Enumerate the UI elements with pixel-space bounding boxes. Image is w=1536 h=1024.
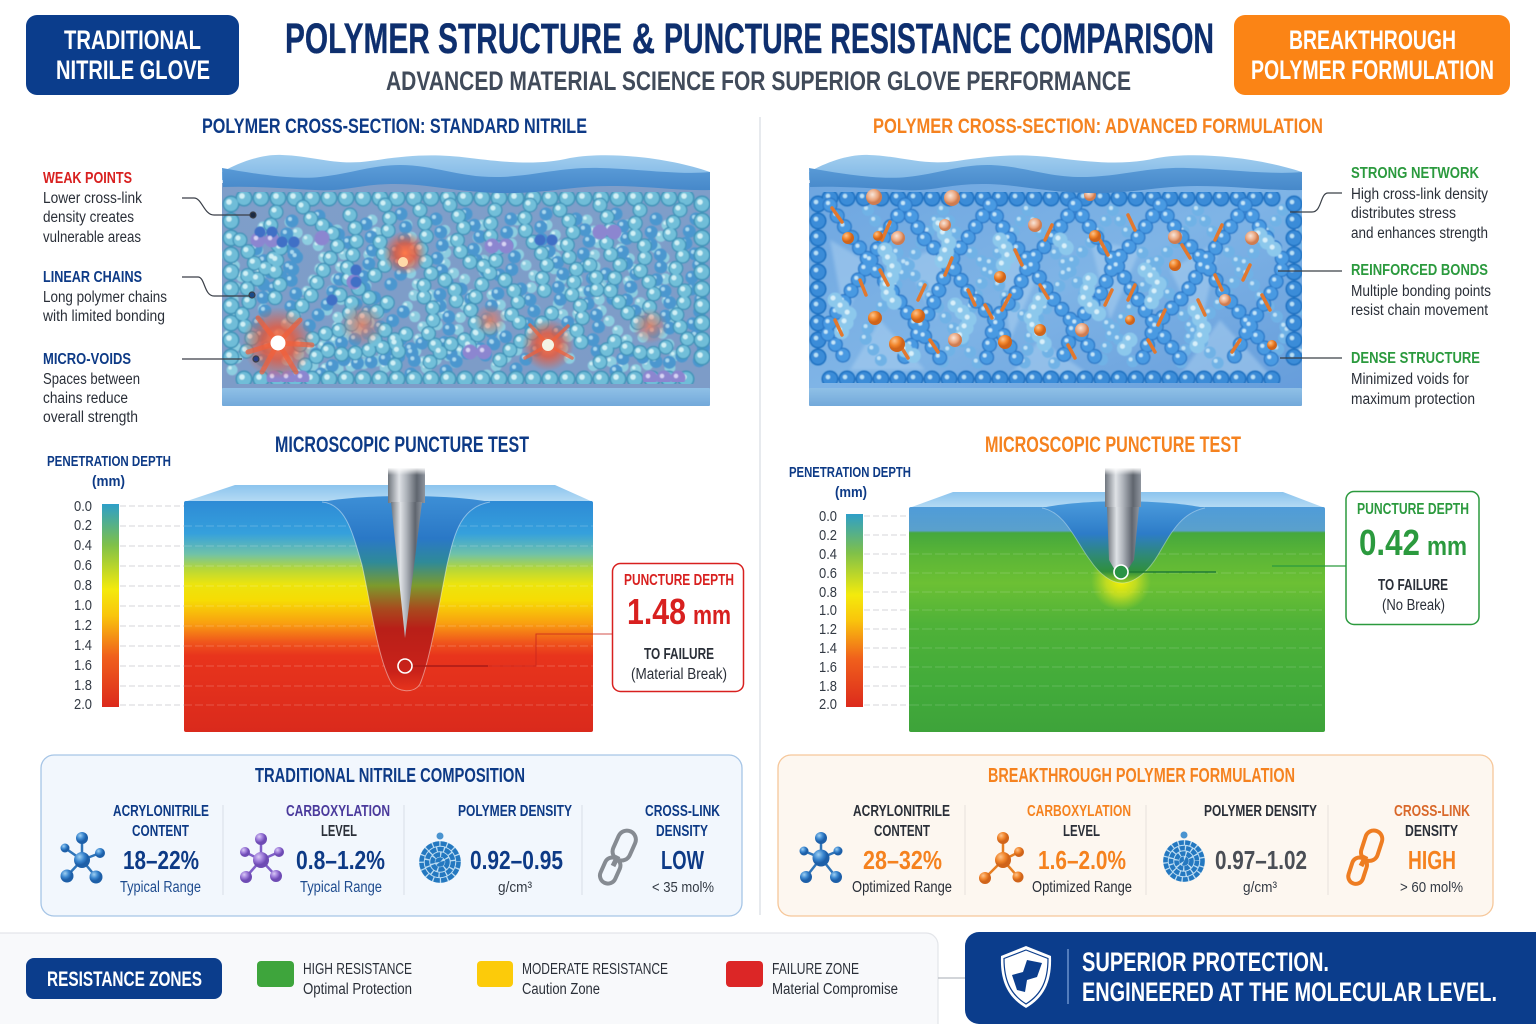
metric: acrylonitrile content: ACRYLONITRILE xyxy=(113,803,209,820)
annotation: weak points: WEAK POINTS xyxy=(43,170,132,187)
legend item: failure zone: Material Compromise xyxy=(772,981,898,998)
legend item: moderate resistance: MODERATE RESISTANCE xyxy=(522,961,668,978)
callout: puncture depth 1.48 mm: (Material Break) xyxy=(631,666,727,683)
beads xyxy=(816,196,1323,379)
depth scale: standard: 0.8 xyxy=(74,577,92,594)
heading: advanced formulation cross-section: POLYMER CROSS-SECTION: ADVANCED FORMULATION xyxy=(873,115,1323,138)
annotation: micro-voids: Spaces between xyxy=(43,371,140,388)
depth scale: advanced: PENETRATION DEPTH xyxy=(789,464,911,481)
title: POLYMER STRUCTURE xyxy=(285,15,622,63)
metric: carboxylation level xyxy=(286,803,390,896)
annotation: strong network: High cross-link density xyxy=(1351,186,1488,203)
icon: polymer density sphere xyxy=(1163,832,1205,882)
annotation: reinforced bonds: Multiple bonding points xyxy=(1351,283,1491,300)
callout: puncture depth 1.48 mm: mm xyxy=(693,600,731,630)
metric: carboxylation level: Optimized Range xyxy=(1032,879,1132,896)
depth scale: standard: 1.8 xyxy=(74,677,92,694)
metric: carboxylation level: 0.8–1.2% xyxy=(296,845,385,875)
legend item: high resistance: Optimal Protection xyxy=(303,981,412,998)
metric: cross-link density: HIGH xyxy=(1408,845,1456,875)
icon: carboxylation molecule xyxy=(979,832,1024,884)
metric: cross-link density xyxy=(645,803,721,896)
annotation: weak points: Lower cross-link xyxy=(43,190,142,207)
diagram: advanced formulation polymer cross-section xyxy=(809,155,1342,406)
depth scale: advanced: 0.0 xyxy=(819,508,837,525)
depth scale: standard: 0.0 xyxy=(74,498,92,515)
metric: carboxylation level: CARBOXYLATION xyxy=(286,803,390,820)
legend item: failure zone: FAILURE ZONE xyxy=(772,961,859,978)
badge: breakthrough polymer formulation: BREAKTHROUGH xyxy=(1289,25,1456,55)
heading: puncture test, advanced: MICROSCOPIC PUNCTURE TEST xyxy=(985,432,1241,457)
depth scale: advanced: 2.0 xyxy=(819,696,837,713)
panel: traditional nitrile composition xyxy=(41,755,742,916)
depth scale: standard: 1.6 xyxy=(74,657,92,674)
top membrane layer xyxy=(809,155,1302,193)
metric: polymer density: POLYMER DENSITY xyxy=(1204,803,1317,820)
annotation: weak points: vulnerable areas xyxy=(43,229,141,246)
depth scale: advanced: 0.8 xyxy=(819,584,837,601)
annotation: micro-voids: chains reduce xyxy=(43,390,128,407)
depth scale: advanced: 1.4 xyxy=(819,640,837,657)
annotation: linear chains: with limited bonding xyxy=(42,308,165,325)
callout: puncture depth 1.48 mm xyxy=(612,564,744,692)
annotation: weak points: density creates xyxy=(43,209,134,226)
heading: standard nitrile cross-section: POLYMER CROSS-SECTION: STANDARD NITRILE xyxy=(202,115,587,138)
banner text xyxy=(1082,947,1497,1007)
annotation: strong network xyxy=(1351,165,1488,242)
icon: polymer density sphere xyxy=(419,832,461,883)
depth scale: standard: 1.0 xyxy=(74,597,92,614)
annotation: strong network: and enhances strength xyxy=(1351,225,1488,242)
metric: polymer density: 0.97–1.02 xyxy=(1215,845,1307,875)
icon: grey chain link xyxy=(597,828,639,886)
legend item: moderate resistance: Caution Zone xyxy=(522,981,600,998)
metric: cross-link density: DENSITY xyxy=(656,823,709,840)
annotation: strong network: STRONG NETWORK xyxy=(1351,165,1479,182)
depth scale: advanced xyxy=(789,464,911,713)
icon: acrylonitrile molecule xyxy=(60,832,105,884)
badge: breakthrough polymer formulation xyxy=(1234,15,1510,95)
annotation: reinforced bonds xyxy=(1351,262,1491,319)
banner: superior protection xyxy=(965,932,1536,1024)
heading: puncture test, standard: MICROSCOPIC PUNCTURE TEST xyxy=(275,432,529,457)
panel: breakthrough polymer formulation xyxy=(778,755,1493,916)
puncture test block: standard nitrile xyxy=(184,468,612,732)
puncture test block: advanced formulation xyxy=(909,468,1346,732)
orange cross-links xyxy=(832,208,1270,358)
metric: acrylonitrile content: 28–32% xyxy=(863,845,942,875)
title xyxy=(285,15,1214,63)
metric: acrylonitrile content: 18–22% xyxy=(123,845,199,875)
legend item: high resistance: HIGH RESISTANCE xyxy=(303,961,412,978)
badge: traditional nitrile glove: NITRILE GLOVE xyxy=(56,55,210,85)
badge: traditional nitrile glove: TRADITIONAL xyxy=(64,25,201,55)
callout: puncture depth 1.48 mm: PUNCTURE DEPTH xyxy=(624,572,734,589)
depth scale: advanced: 1.6 xyxy=(819,659,837,676)
annotations: advanced formulation xyxy=(1351,165,1491,408)
callout: puncture depth 0.42 mm: (No Break) xyxy=(1382,597,1445,614)
metric: carboxylation level: Typical Range xyxy=(300,879,382,896)
metric: cross-link density xyxy=(1394,803,1471,896)
marker and leader xyxy=(398,634,612,673)
icon: carboxylation molecule xyxy=(240,833,284,883)
metric: cross-link density: CROSS-LINK xyxy=(645,803,721,820)
metric: polymer density xyxy=(458,803,573,896)
bottom membrane layer xyxy=(222,388,710,406)
subtitle: ADVANCED MATERIAL SCIENCE FOR SUPERIOR GLOVE PERFORMANCE xyxy=(386,66,1131,96)
metric: polymer density xyxy=(1204,803,1317,896)
marker and leader xyxy=(1114,565,1346,579)
metric: carboxylation level xyxy=(1027,803,1132,896)
depth scale: advanced: 1.8 xyxy=(819,678,837,695)
panel heading: BREAKTHROUGH POLYMER FORMULATION xyxy=(988,765,1295,787)
metric: polymer density: POLYMER DENSITY xyxy=(458,803,573,820)
metric: polymer density: g/cm³ xyxy=(498,879,532,896)
callout: puncture depth 0.42 mm: TO FAILURE xyxy=(1378,577,1448,594)
annotation: micro-voids xyxy=(43,351,140,426)
callout: puncture depth 0.42 mm xyxy=(1346,492,1479,624)
metric: acrylonitrile content xyxy=(113,803,209,896)
title: PUNCTURE RESISTANCE COMPARISON xyxy=(664,15,1214,63)
metric: carboxylation level: CARBOXYLATION xyxy=(1027,803,1131,820)
annotation: weak points xyxy=(43,170,142,246)
depth scale: advanced: 0.6 xyxy=(819,565,837,582)
legend panel: resistance zones xyxy=(0,933,938,1024)
icon: orange chain link xyxy=(1346,828,1385,886)
yellow glow xyxy=(1091,551,1151,611)
depth scale: standard: 1.4 xyxy=(74,637,92,654)
icon: acrylonitrile molecule xyxy=(800,832,842,883)
annotation: dense structure xyxy=(1351,350,1480,408)
leader lines xyxy=(1278,193,1342,358)
metric: carboxylation level: LEVEL xyxy=(321,823,357,840)
annotation: micro-voids: MICRO-VOIDS xyxy=(43,351,131,368)
metric: cross-link density: LOW xyxy=(661,845,704,875)
annotation: micro-voids: overall strength xyxy=(43,409,138,426)
metric: cross-link density: < 35 mol% xyxy=(652,879,714,896)
depth scale: standard: 1.2 xyxy=(74,617,92,634)
legend title xyxy=(26,958,222,999)
top membrane layer xyxy=(222,155,710,193)
needle xyxy=(1105,468,1141,572)
needle xyxy=(388,468,425,638)
annotation: linear chains xyxy=(42,269,167,325)
bottom membrane layer xyxy=(809,388,1302,406)
metric: acrylonitrile content: CONTENT xyxy=(132,823,189,840)
metric: cross-link density: > 60 mol% xyxy=(1400,879,1463,896)
violet and dark blue beads xyxy=(229,193,684,378)
callout: puncture depth 0.42 mm: PUNCTURE DEPTH xyxy=(1357,501,1469,518)
depth scale: standard: PENETRATION DEPTH xyxy=(47,453,171,470)
lattice facets xyxy=(830,240,1270,375)
depth scale: advanced: (mm) xyxy=(835,484,867,501)
depth scale: standard: 2.0 xyxy=(74,696,92,713)
callout: puncture depth 0.42 mm: mm xyxy=(1427,531,1467,561)
annotation: strong network: distributes stress xyxy=(1351,205,1456,222)
depth scale: advanced: 1.2 xyxy=(819,621,837,638)
annotation: dense structure: DENSE STRUCTURE xyxy=(1351,350,1480,367)
leader lines xyxy=(182,198,259,362)
legend item: high resistance xyxy=(257,961,412,998)
annotation: linear chains: LINEAR CHAINS xyxy=(43,269,142,286)
dent xyxy=(322,496,490,691)
annotations: standard nitrile xyxy=(42,170,167,426)
metric: polymer density: g/cm³ xyxy=(1243,879,1277,896)
annotation: dense structure: Minimized voids for xyxy=(1351,371,1469,388)
depth scale: standard: (mm) xyxy=(92,473,125,490)
metric: acrylonitrile content: Typical Range xyxy=(120,879,201,896)
panel heading: TRADITIONAL NITRILE COMPOSITION xyxy=(255,765,525,787)
icon: shield xyxy=(1001,946,1051,1008)
metric: acrylonitrile content: ACRYLONITRILE xyxy=(853,803,950,820)
bead chains xyxy=(225,196,704,380)
legend item: moderate resistance xyxy=(477,961,668,998)
legend title: RESISTANCE ZONES xyxy=(47,968,202,991)
title: & xyxy=(632,15,655,63)
dent xyxy=(1042,501,1205,583)
callout: puncture depth 1.48 mm: TO FAILURE xyxy=(644,646,714,663)
depth scale: standard: 0.4 xyxy=(74,537,92,554)
banner text: SUPERIOR PROTECTION. xyxy=(1082,947,1329,977)
metric: carboxylation level: 1.6–2.0% xyxy=(1038,845,1126,875)
metric: acrylonitrile content: Optimized Range xyxy=(852,879,952,896)
callout: puncture depth 0.42 mm: 0.42 xyxy=(1359,522,1420,563)
badge: traditional nitrile glove xyxy=(26,15,239,95)
depth scale: advanced: 1.0 xyxy=(819,602,837,619)
annotation: dense structure: maximum protection xyxy=(1351,391,1475,408)
legend item: failure zone xyxy=(726,961,898,998)
depth scale: standard: 0.6 xyxy=(74,557,92,574)
annotation: linear chains: Long polymer chains xyxy=(43,289,167,306)
depth scale: advanced: 0.4 xyxy=(819,546,837,563)
diagram: standard nitrile polymer cross-section xyxy=(182,155,710,406)
annotation: reinforced bonds: REINFORCED BONDS xyxy=(1351,262,1488,279)
metric: acrylonitrile content xyxy=(852,803,952,896)
red stress bursts xyxy=(242,231,668,379)
depth scale: standard: 0.2 xyxy=(74,517,92,534)
depth scale: standard xyxy=(47,453,184,713)
annotation: reinforced bonds: resist chain movement xyxy=(1351,302,1489,319)
metric: carboxylation level: LEVEL xyxy=(1063,823,1100,840)
depth scale: advanced: 0.2 xyxy=(819,527,837,544)
metric: acrylonitrile content: CONTENT xyxy=(874,823,930,840)
metric: cross-link density: DENSITY xyxy=(1405,823,1459,840)
callout: puncture depth 1.48 mm: 1.48 xyxy=(627,591,686,632)
metric: cross-link density: CROSS-LINK xyxy=(1394,803,1471,820)
metric: polymer density: 0.92–0.95 xyxy=(470,845,563,875)
